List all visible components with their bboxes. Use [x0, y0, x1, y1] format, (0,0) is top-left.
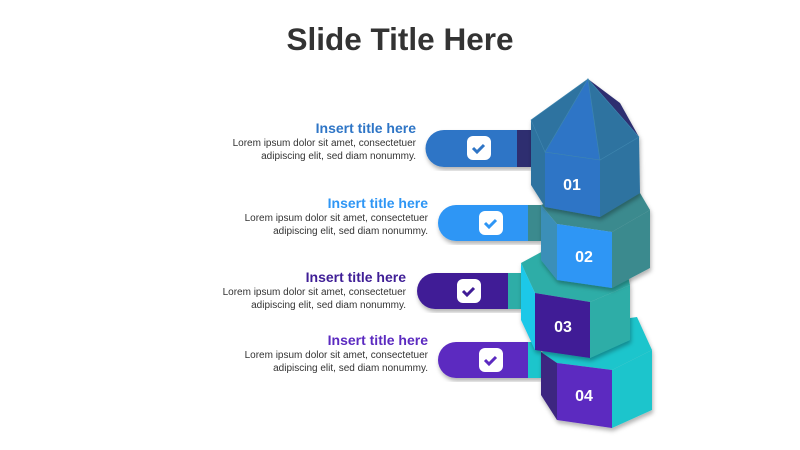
block 03: 03	[554, 319, 572, 336]
text block 3	[223, 269, 406, 310]
text block 1: Insert title here	[316, 120, 416, 136]
block 04: 04	[575, 388, 593, 405]
title: Slide Title Here	[286, 21, 514, 57]
text block 2	[245, 195, 428, 236]
text block 3: Insert title here	[306, 269, 406, 285]
text block 1: Lorem ipsum dolor sit amet, consectetuer	[233, 138, 416, 149]
block 02	[541, 190, 650, 288]
block 01	[531, 79, 640, 217]
text block 4: Insert title here	[328, 332, 428, 348]
text block 1: adipiscing elit, sed diam nonummy.	[261, 150, 416, 162]
pill 4	[438, 342, 541, 378]
text block 1	[233, 120, 416, 162]
block 02: 02	[575, 249, 593, 266]
text block 2: Insert title here	[328, 195, 428, 211]
block 01: 01	[563, 177, 581, 194]
text block 4: adipiscing elit, sed diam nonummy.	[273, 362, 428, 374]
text block 3: adipiscing elit, sed diam nonummy.	[251, 300, 406, 310]
text block 3: Lorem ipsum dolor sit amet, consectetuer	[223, 287, 406, 298]
pill 1	[426, 130, 531, 167]
text block 2: Lorem ipsum dolor sit amet, consectetuer	[245, 213, 428, 224]
text block 4	[245, 332, 428, 374]
pill 2	[438, 205, 541, 241]
text block 2: adipiscing elit, sed diam nonummy.	[273, 226, 428, 236]
text block 4: Lorem ipsum dolor sit amet, consectetuer	[245, 350, 428, 361]
block 04	[541, 317, 652, 428]
block 03	[521, 250, 630, 358]
pill 3	[417, 273, 521, 309]
